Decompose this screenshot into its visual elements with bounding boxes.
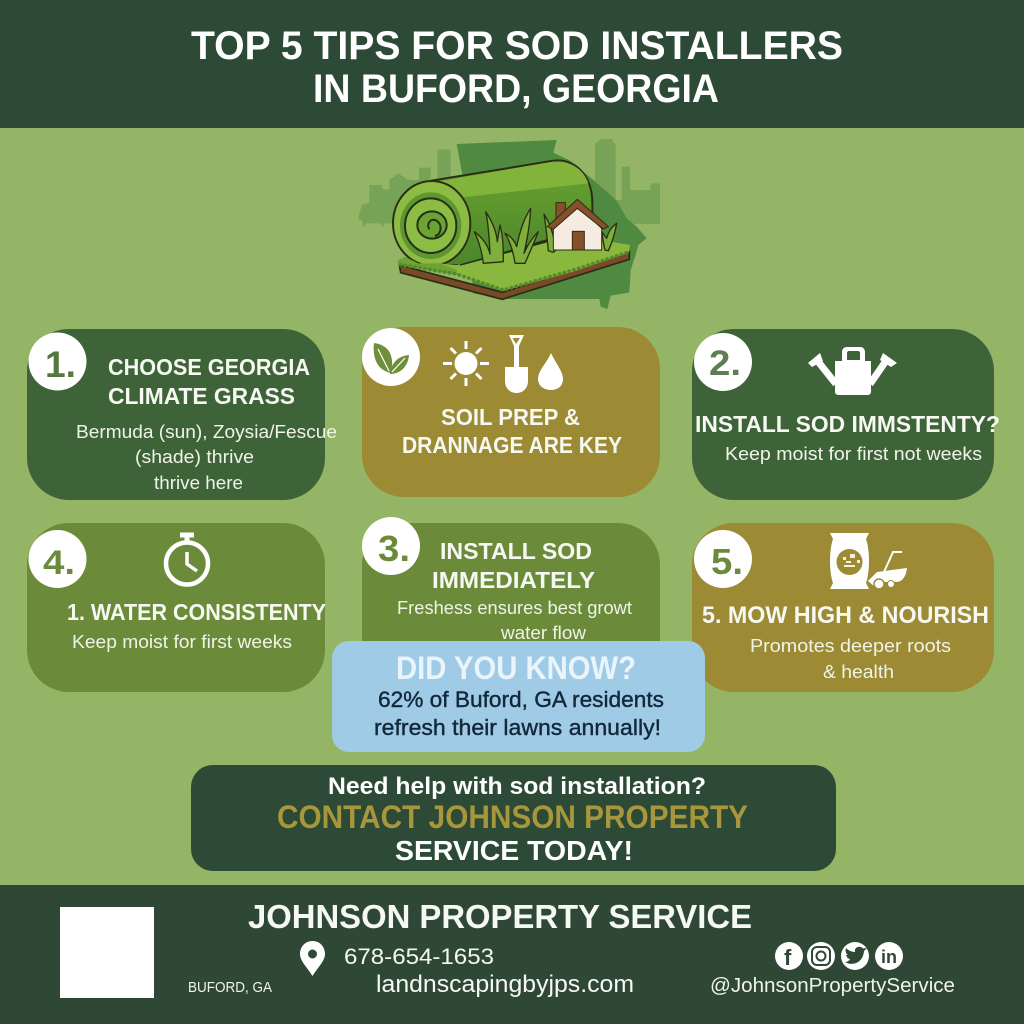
location: BUFORD, GA	[188, 980, 272, 996]
tip 2 heading: DRANNAGE ARE KEY	[402, 432, 622, 458]
ground slab	[397, 242, 630, 299]
footer	[0, 885, 1024, 1024]
social icons: in	[881, 947, 897, 967]
panel: mow high and nourish	[692, 523, 994, 692]
number badge 4: 4.	[43, 544, 75, 582]
number badge 3	[362, 517, 420, 575]
call to action: Need help with sod installation?	[328, 773, 706, 800]
panel: install sod immediately (number 2)	[692, 329, 1000, 500]
number badge 5	[694, 530, 752, 588]
company name: JOHNSON PROPERTY SERVICE	[248, 898, 752, 935]
icon: watering can	[808, 347, 897, 395]
phone: 678-654-1653	[344, 944, 494, 969]
tip 5 body	[397, 598, 632, 643]
tip 5 body: Freshess ensures best growt	[397, 598, 632, 618]
tip 6 heading: 5. MOW HIGH & NOURISH	[702, 602, 989, 629]
callout: did you know: DID YOU KNOW?	[396, 650, 636, 686]
callout: did you know: 62% of Buford, GA residents	[378, 687, 664, 712]
icon: water drop	[538, 353, 563, 390]
logo placeholder	[60, 907, 154, 998]
tip 5 body: water flow	[500, 623, 587, 643]
tip 4 heading: 1. WATER CONSISTENTY	[67, 599, 326, 625]
call to action	[191, 765, 836, 871]
tip 1 body: (shade) thrive	[135, 446, 254, 467]
tip 3 body: Keep moist for first not weeks	[725, 443, 982, 464]
tip 2 heading	[402, 404, 622, 458]
icon: fertilizer bag and mower	[830, 533, 907, 589]
number badge 1: 1.	[45, 344, 76, 385]
tip 6 body: Promotes deeper roots	[750, 635, 951, 656]
number badge 5: 5.	[711, 541, 743, 582]
title: IN BUFORD, GEORGIA	[313, 67, 719, 111]
social handle: @JohnsonPropertyService	[710, 975, 955, 997]
tip 5 heading	[432, 538, 595, 593]
tip 2 heading: SOIL PREP &	[441, 404, 580, 430]
icon: map pin	[300, 941, 325, 976]
tip 6 body	[750, 635, 951, 682]
panel: install sod immediately (number 3)	[362, 517, 660, 660]
number badge 3: 3.	[378, 528, 410, 569]
panel: water consistently	[27, 523, 326, 692]
number badge 2: 2.	[709, 344, 741, 383]
number badge 4	[28, 530, 86, 588]
tip 1 heading	[108, 354, 310, 409]
hero illustration: sod roll over Georgia map	[358, 139, 660, 309]
tip 1 body	[76, 421, 337, 493]
tip 5 heading: INSTALL SOD	[440, 538, 592, 564]
social icons: f	[784, 945, 792, 970]
number badge 1	[28, 332, 86, 390]
icon: stopwatch	[166, 535, 208, 584]
panel: soil prep and drainage	[362, 327, 660, 497]
website: landnscapingbyjps.com	[376, 971, 634, 998]
social icons	[775, 942, 903, 970]
call to action: SERVICE TODAY!	[395, 835, 633, 866]
tip 3 heading: INSTALL SOD IMMSTENTY?	[695, 411, 1000, 437]
tip 5 heading: IMMEDIATELY	[432, 567, 595, 593]
call to action: CONTACT JOHNSON PROPERTY	[277, 799, 748, 835]
header banner	[0, 0, 1024, 128]
tip 1 body: Bermuda (sun), Zoysia/Fescue	[76, 421, 337, 442]
tip 6 body: & health	[823, 661, 894, 682]
callout: did you know: refresh their lawns annually!	[374, 715, 661, 740]
leaf badge	[362, 328, 420, 386]
sod roll	[393, 160, 592, 266]
tip 1 body: thrive here	[154, 472, 243, 493]
tip 1 heading: CLIMATE GRASS	[108, 383, 295, 409]
house	[547, 199, 608, 250]
panel: tip 1 choose grass	[27, 329, 337, 500]
title: TOP 5 TIPS FOR SOD INSTALLERS	[191, 24, 843, 68]
grass tufts	[474, 208, 617, 263]
tip 4 body: Keep moist for first weeks	[72, 631, 292, 652]
icon: sun	[443, 341, 489, 386]
tip 1 heading: CHOOSE GEORGIA	[108, 354, 310, 380]
title	[191, 24, 843, 111]
number badge 2	[694, 333, 752, 391]
callout: did you know	[332, 641, 705, 752]
icon: shovel	[505, 335, 528, 393]
